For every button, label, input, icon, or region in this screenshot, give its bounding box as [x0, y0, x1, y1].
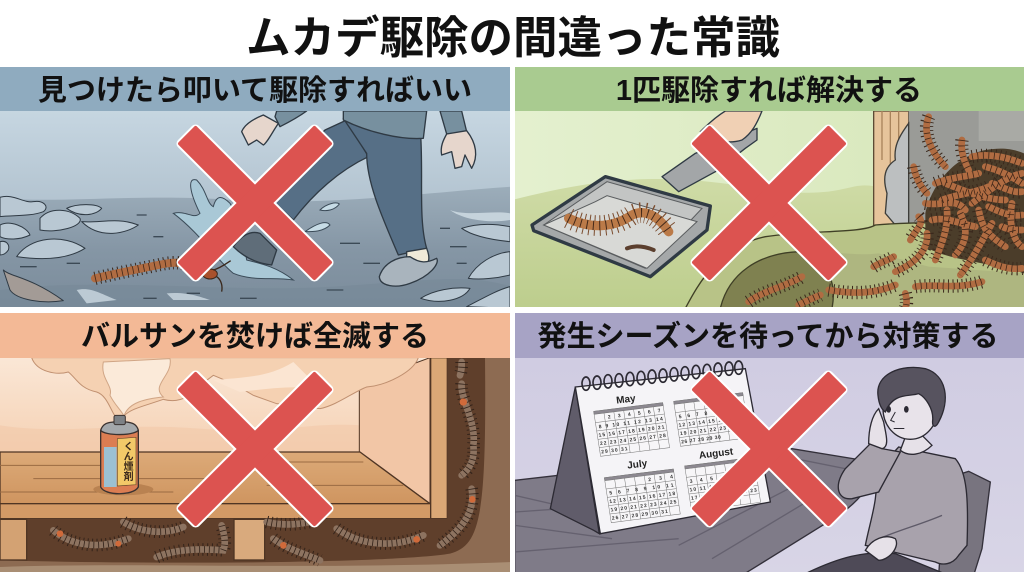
panel: バルサン [0, 313, 512, 572]
month: May [594, 393, 670, 456]
month: July: July [627, 458, 648, 472]
person: legs [802, 553, 949, 572]
panel header bar [515, 67, 1024, 111]
month: July: 12 13 14 15 16 17 18 [609, 491, 676, 505]
illustration: fumigator under floor [0, 358, 512, 572]
panel: 1匹駆除 [512, 67, 1024, 313]
man: legs [275, 118, 427, 255]
month: July: 5 6 7 8 9 10 11 [609, 483, 674, 497]
dustpan [532, 177, 710, 277]
month: August: 17 18 19 20 21 22 23 [691, 488, 757, 502]
red cross mark [691, 371, 847, 527]
support posts [0, 519, 27, 560]
snow piles and leaves [0, 196, 510, 308]
month: June: 19 20 21 22 23 24 25 [680, 423, 746, 437]
calendar [550, 361, 770, 534]
soil channel [7, 358, 486, 563]
person: hair [878, 367, 945, 426]
title: ムカデ駆除の間違った常識 [246, 14, 780, 63]
month: May: 15 16 17 18 19 20 21 [598, 425, 665, 439]
month: May: 8 9 10 11 12 13 14 [598, 416, 664, 430]
man: hands [441, 131, 476, 168]
small centipede on dustpan [627, 247, 654, 250]
month: May: 22 23 24 25 26 27 28 [600, 433, 666, 447]
month: June: 5 6 7 8 9 10 11 [678, 406, 744, 420]
ground speckles [20, 215, 467, 298]
panel heading: バルサンを焚けば全滅する [81, 320, 429, 353]
panel heading: 発生シーズンを待ってから対策する [537, 319, 999, 353]
month: August: 10 11 12 13 14 15 16 [689, 479, 756, 493]
centipedes under floor [53, 362, 476, 560]
month: August: August [698, 446, 734, 462]
month: July: 2 3 4 [648, 474, 674, 483]
man: sweater [343, 111, 427, 139]
illustration: waiting beside a calendar [512, 358, 1024, 572]
smoke cloud [32, 358, 418, 416]
red cross mark [177, 125, 333, 281]
concrete wall [909, 111, 1024, 228]
fumigator can [93, 415, 153, 495]
centipede mass at wall [749, 117, 1024, 308]
centipede [95, 261, 231, 292]
soil and burrow [685, 223, 1024, 313]
panel header bar [0, 67, 510, 111]
person: face [886, 406, 909, 429]
chair [939, 471, 990, 572]
can label text: くん煙剤 [121, 441, 133, 482]
month: May: May [616, 393, 637, 407]
illustration: dustpan and hidden nest [512, 111, 1024, 313]
person: hand on cheek [869, 409, 887, 449]
month: July: 26 27 28 29 30 31 [612, 509, 669, 522]
wooden shelf [0, 452, 430, 504]
large centipede on dustpan [569, 213, 669, 232]
month: June: 12 13 14 15 16 17 18 [678, 415, 745, 429]
month: June [674, 393, 750, 446]
calendar rings [582, 361, 743, 390]
person: hand on lap [865, 537, 897, 560]
red cross mark [177, 371, 333, 527]
slippers [406, 248, 430, 262]
month: July [604, 458, 680, 523]
dustpan handle [662, 128, 757, 192]
splash [173, 180, 339, 280]
month: June: 26 27 28 29 30 [681, 435, 721, 445]
month: July: 19 20 21 22 23 24 25 [610, 499, 677, 513]
panel heading: 見つけたら叩いて駆除すればいい [38, 74, 472, 107]
month: May: 29 30 31 [601, 446, 628, 455]
panel: シーズンを待つ [512, 313, 1024, 572]
person: head [883, 378, 938, 439]
panel header bar [515, 313, 1024, 358]
illustration: stepping on a centipede [0, 111, 512, 313]
panel header bar [0, 313, 510, 358]
month: August [685, 446, 761, 511]
red cross mark [691, 125, 847, 281]
table [515, 449, 874, 572]
person: sweater [865, 447, 968, 564]
wooden post [874, 111, 909, 234]
month: August: 3 4 5 6 7 8 9 [689, 471, 755, 485]
hand [700, 111, 762, 142]
panel heading: 1匹駆除すれば解決する [616, 74, 922, 107]
month: May: 2 3 4 5 6 7 [608, 408, 661, 421]
panel: 叩いて駆除 [0, 67, 512, 313]
